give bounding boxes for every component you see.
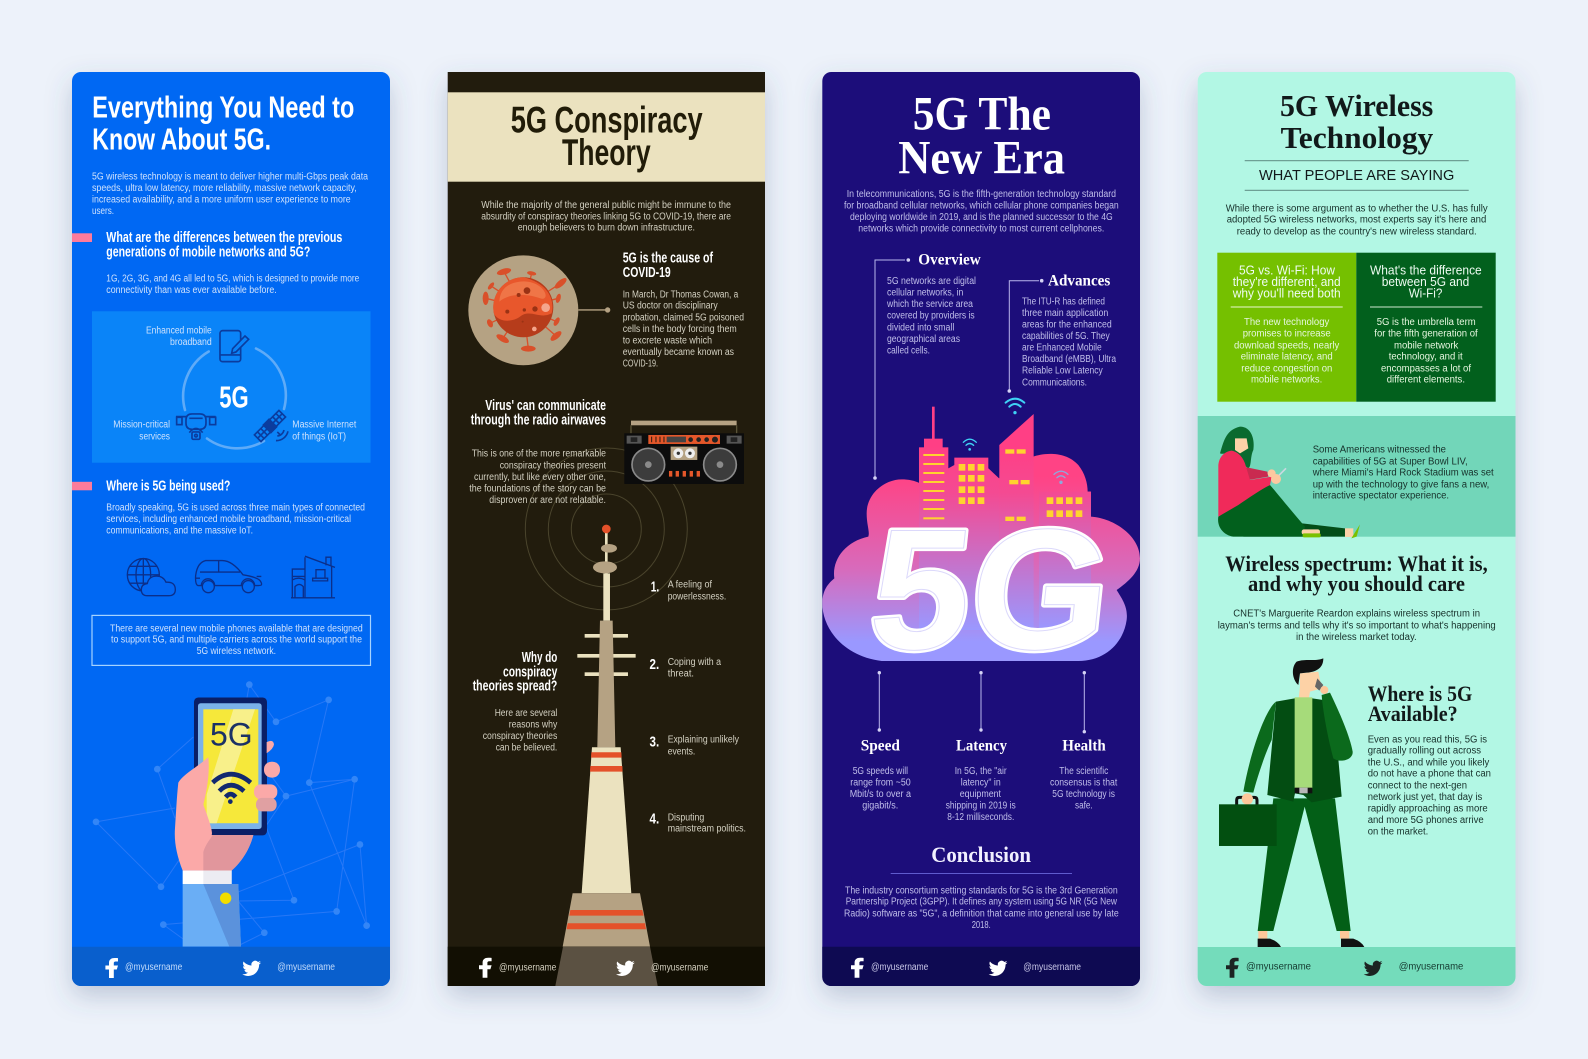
intro text: users.	[92, 206, 114, 217]
text: cause of covid: cells in the body forcing them	[623, 324, 737, 335]
icon: wifi large	[1006, 399, 1024, 414]
list item 3: events.	[668, 746, 695, 757]
title: Everything You Need to	[92, 89, 354, 124]
text: conclusion	[844, 885, 1119, 931]
intro text: deploying worldwide in 2019, and is the planned successor to the 4G	[850, 212, 1113, 223]
icon: wifi right	[1054, 471, 1068, 484]
handle: @myusername	[1023, 962, 1081, 973]
text: advances: capabilities of 5G. They	[1022, 331, 1110, 342]
heading: radio airwaves: through the radio airwaves	[471, 412, 606, 428]
text: where available: rapidly approaching as more	[1368, 803, 1488, 814]
list item 2: 2.	[650, 656, 659, 673]
column: latency: 8-12 milliseconds.	[947, 812, 1014, 823]
text: overview: covered by providers is	[887, 311, 975, 322]
icon: twitter	[1364, 961, 1382, 976]
box: difference between 5G and Wi-Fi	[1356, 253, 1496, 402]
sleeve	[183, 871, 241, 947]
text: super bowl: capabilities of 5G at Super Bowl LIV,	[1313, 456, 1468, 467]
text: overview: divided into small	[887, 322, 954, 333]
title	[898, 87, 1065, 184]
network background	[93, 681, 370, 945]
box: difference between 5G and Wi-Fi: mobile network	[1394, 340, 1459, 351]
text: cause of covid: In March, Dr Thomas Cowan, a	[623, 289, 739, 300]
heading: why spread: Why do	[522, 650, 557, 666]
column: health: The scientific	[1059, 766, 1108, 777]
list item 1: A feeling of	[668, 580, 712, 591]
heading: wireless spectrum: Wireless spectrum: What it is,	[1225, 551, 1488, 576]
signal rings	[525, 448, 687, 610]
icon: facebook	[479, 958, 492, 978]
panel: 5G conspiracy theory	[448, 72, 765, 986]
box: 5G vs Wi-Fi: 5G vs. Wi-Fi: How	[1239, 264, 1336, 278]
icon: twitter	[616, 961, 635, 976]
title: Technology	[1281, 120, 1434, 155]
column: latency: Latency	[956, 738, 1007, 755]
intro text: networks which provide connectivity to most current cellphones.	[858, 224, 1104, 235]
text: why spread: Here are several	[495, 708, 557, 719]
callout box: There are several new mobile phones available that are designed	[110, 623, 363, 634]
text: conclusion: Radio) software as "5G", a definition that came into general use by late	[844, 908, 1119, 919]
box: difference between 5G and Wi-Fi: between 5G and	[1382, 275, 1469, 289]
footer: social	[448, 947, 765, 986]
text: where used	[106, 503, 365, 537]
text: wireless spectrum: CNET's Marguerite Reardon explains wireless spectrum in	[1233, 609, 1480, 620]
text: where available: the U.S., and while you likely	[1368, 757, 1489, 768]
column: speed	[850, 738, 911, 812]
box: 5G vs Wi-Fi: download speeds, nearly	[1234, 340, 1339, 351]
label: mission critical: services	[139, 431, 170, 442]
title band: 5G Conspiracy	[511, 100, 703, 141]
text: cause of covid: to excrete waste which	[623, 335, 712, 346]
intro text: While there is some argument as to whether the U.S. has fully	[1226, 203, 1488, 214]
text: advances: are Enhanced Mobile	[1022, 343, 1102, 354]
text: advances: three main application	[1022, 308, 1108, 319]
text: where available	[1368, 734, 1491, 837]
footer: social	[72, 947, 390, 986]
connector: advances	[1008, 279, 1043, 393]
column: speed: Mbit/s to over a	[850, 789, 911, 800]
box: 5G vs Wi-Fi: they're different, and	[1233, 275, 1341, 289]
icon: twitter	[242, 961, 261, 976]
text: radio airwaves: the foundations of the story can be	[469, 483, 606, 494]
box: 5G vs Wi-Fi	[1217, 253, 1356, 402]
heading: overview: Overview	[918, 251, 981, 268]
text: cause of covid	[623, 289, 744, 370]
intro text: ready to develop as the country's new wireless standard.	[1237, 226, 1477, 237]
heading: where used: Where is 5G being used?	[106, 478, 230, 494]
text: why spread: reasons why	[509, 720, 557, 731]
list item 1: 1.	[651, 579, 659, 596]
text: where used: communications, and the massive IoT.	[106, 526, 253, 537]
list item 4: mainstream politics.	[668, 824, 746, 835]
illustration: boombox	[624, 421, 744, 484]
text: wireless spectrum	[1218, 609, 1496, 643]
windows	[923, 449, 1082, 521]
list item 2: Coping with a	[668, 657, 721, 668]
heading: cause of covid	[623, 251, 713, 281]
box: difference between 5G and Wi-Fi: technology, and it	[1389, 352, 1463, 363]
text: conclusion: 2018.	[972, 920, 991, 931]
intro text: 5G wireless technology is meant to deliver higher multi-Gbps peak data	[92, 171, 368, 182]
box: difference between 5G and Wi-Fi: for the fifth generation of	[1374, 329, 1478, 340]
phone: 5G	[210, 716, 253, 753]
heading: why spread	[473, 650, 557, 695]
column: speed: range from ~50	[850, 778, 911, 789]
heading: cause of covid: 5G is the cause of	[623, 251, 713, 267]
subtitle with rules: WHAT PEOPLE ARE SAYING	[1259, 167, 1454, 184]
text: where available: and more 5G phones arrive	[1368, 815, 1484, 826]
text: overview: called cells.	[887, 345, 930, 356]
box: 5G vs Wi-Fi: why you'll need both	[1232, 287, 1341, 301]
column: health: Health	[1062, 738, 1106, 755]
title	[92, 89, 354, 156]
heading: where available	[1368, 681, 1472, 726]
list item 4: Disputing	[668, 812, 704, 823]
illustration: tower	[563, 525, 650, 947]
icon: car	[195, 561, 262, 593]
text: advances: Broadband (eMBB), Ultra	[1022, 354, 1116, 365]
handle: @myusername	[499, 962, 557, 973]
column: health: 5G technology is	[1052, 789, 1115, 800]
text: advances: Reliable Low Latency	[1022, 366, 1103, 377]
icon: twitter	[989, 961, 1007, 976]
text: cause of covid: US doctor on disciplinary	[623, 301, 718, 312]
text: why spread: can be believed.	[496, 743, 557, 754]
label: enhanced mobile broadband: Enhanced mobile	[146, 325, 212, 336]
heading: wireless spectrum	[1225, 551, 1488, 596]
text: overview: cellular networks, in	[887, 288, 963, 299]
intro text	[844, 189, 1119, 235]
handle: @myusername	[1399, 961, 1464, 972]
heading: why spread: conspiracy	[503, 665, 557, 681]
label: enhanced mobile broadband	[146, 325, 212, 348]
text: overview: geographical areas	[887, 334, 960, 345]
title: Know About 5G.	[92, 121, 271, 156]
icon: facebook	[105, 958, 118, 978]
column: speed: 5G speeds will	[853, 766, 908, 777]
label: massive iot: of things (IoT)	[292, 431, 346, 442]
icon: facebook	[851, 958, 864, 978]
panel: everything you need to know about 5G	[72, 72, 390, 986]
icon: satellite	[254, 410, 288, 442]
heading: cause of covid: COVID-19	[623, 265, 671, 281]
buildings	[919, 407, 1091, 630]
text: advances: The ITU-R has defined	[1022, 296, 1105, 307]
heading: advances: Advances	[1048, 273, 1110, 290]
text: radio airwaves: This is one of the more remarkable	[472, 449, 606, 460]
accent bar	[72, 482, 92, 490]
intro text: enough believers to burn down infrastructure.	[518, 223, 695, 234]
text: cause of covid: eventually became known as	[623, 347, 734, 358]
text: super bowl: where Miami's Hard Rock Stadium was set	[1312, 468, 1494, 479]
text: why spread	[483, 708, 557, 754]
list item 4: 4.	[650, 811, 659, 828]
label: 5G: 5G	[219, 380, 249, 415]
box: 5G vs Wi-Fi: promises to increase	[1243, 329, 1331, 340]
text: cause of covid: COVID-19.	[623, 359, 658, 370]
column: speed: gigabit/s.	[862, 801, 898, 812]
list item 1	[651, 579, 726, 602]
column: latency: equipment	[960, 789, 1001, 800]
panel: 5G uses diagram	[92, 311, 370, 463]
text: generations: connectivity than was ever available before.	[106, 285, 277, 296]
handle: @myusername	[1246, 961, 1311, 972]
text: advances: areas for the enhanced	[1022, 319, 1112, 330]
box: difference between 5G and Wi-Fi: encompasses a lot of	[1381, 363, 1471, 374]
box: difference between 5G and Wi-Fi: 5G is the umbrella term	[1377, 317, 1476, 328]
icon: wifi small	[963, 439, 976, 451]
text: super bowl	[1312, 445, 1494, 502]
box: 5G vs Wi-Fi: reduce congestion on	[1241, 363, 1332, 374]
text: radio airwaves: conspiracy theories present	[500, 460, 606, 471]
box: difference between 5G and Wi-Fi: What's the difference	[1370, 264, 1482, 278]
text: radio airwaves	[469, 449, 606, 506]
intro text: In telecommunications, 5G is the fifth-generation technology standard	[847, 189, 1116, 200]
handle: @myusername	[871, 962, 929, 973]
intro text	[1226, 203, 1488, 237]
illustration: woman with phone	[1218, 427, 1360, 538]
column: latency: shipping in 2019 is	[946, 801, 1016, 812]
column: latency	[946, 738, 1016, 823]
text: where available: gradually rolling out across	[1368, 746, 1481, 757]
handle: @myusername	[651, 962, 709, 973]
intro text: adopted 5G wireless networks, most experts say it's here and	[1227, 215, 1486, 226]
box: 5G vs Wi-Fi: The new technology	[1244, 317, 1329, 328]
column: health: consensus is that	[1050, 778, 1117, 789]
heading: wireless spectrum: and why you should care	[1248, 571, 1465, 596]
illustration: virus	[468, 255, 610, 365]
text: overview	[886, 276, 976, 356]
text: generations	[106, 273, 360, 296]
accent bar	[72, 233, 92, 242]
connector: overview	[873, 258, 910, 480]
heading: differences: What are the differences between the previous	[106, 230, 342, 246]
footer: social	[822, 947, 1140, 986]
text: cause of covid: probation, claimed 5G poisoned	[623, 312, 744, 323]
icon: drone	[176, 414, 216, 439]
icon: globe and cloud	[127, 559, 175, 596]
intro text: increased availability, and a more uniform user experience to more	[92, 194, 351, 206]
list item 2	[650, 656, 721, 680]
text: where used: services, including enhanced mobile broadband, mission-critical	[106, 514, 351, 525]
handle: @myusername	[125, 962, 183, 973]
column: latency: latency" in	[961, 778, 1001, 789]
text: radio airwaves: disproven or are not relatable.	[489, 495, 606, 506]
title band	[448, 92, 765, 182]
title band: Theory	[562, 132, 651, 173]
big 5G: 5G	[862, 494, 1121, 686]
intro text: absurdity of conspiracy theories linking 5G to COVID-19, there are	[481, 211, 731, 222]
connectors: speed, latency, health	[878, 671, 1086, 733]
illustration: hand holding 5G phone	[93, 681, 370, 947]
text: super bowl: Some Americans witnessed the	[1313, 445, 1446, 456]
heading: radio airwaves	[471, 398, 606, 428]
big 5G: 5G	[862, 494, 1121, 686]
heading: why spread: theories spread?	[473, 679, 557, 695]
callout box	[92, 615, 370, 665]
text: super bowl: up with the technology to give fans a new,	[1313, 479, 1489, 490]
icon: tablet	[220, 331, 249, 362]
intro text	[92, 171, 368, 217]
box: 5G vs Wi-Fi: mobile networks.	[1251, 375, 1322, 386]
text: overview: which the service area	[886, 299, 973, 310]
text: conclusion: The industry consortium setting standards for 5G is the 3rd Generation	[845, 885, 1118, 896]
column: latency: In 5G, the "air	[955, 766, 1007, 777]
intro text	[481, 200, 731, 234]
text: where available: on the market.	[1368, 826, 1428, 837]
intro text: for broadband cellular networks, which cellular phone companies began	[844, 200, 1119, 211]
heading: differences	[106, 230, 342, 261]
column: health	[1050, 738, 1117, 812]
illustration: city cloud with 5G	[822, 399, 1140, 686]
label: massive iot: Massive Internet	[292, 420, 356, 431]
text: wireless spectrum: in the wireless market today.	[1296, 632, 1417, 643]
panel: 5G wireless technology	[1198, 72, 1516, 986]
text: radio airwaves: currently, but like every other one,	[474, 472, 606, 483]
label: massive iot	[292, 420, 356, 442]
phone	[194, 697, 267, 835]
hand	[175, 741, 280, 871]
text: where available: connect to the next-gen	[1368, 780, 1467, 791]
title: 5G Wireless	[1280, 88, 1433, 123]
list item 3: 3.	[650, 733, 659, 750]
text: advances: Communications.	[1022, 377, 1087, 388]
heading: conclusion: Conclusion	[931, 842, 1031, 867]
heading: where available: Available?	[1368, 701, 1458, 726]
icon: house	[291, 556, 335, 598]
text: why spread: conspiracy theories	[483, 731, 557, 742]
box: difference between 5G and Wi-Fi: different elements.	[1387, 375, 1465, 386]
intro text: speeds, ultra low latency, more reliability, massive network capacity,	[92, 183, 357, 194]
box: 5G vs Wi-Fi: eliminate latency, and	[1241, 352, 1333, 363]
handle: @myusername	[277, 962, 335, 973]
list item 2: threat.	[668, 669, 694, 680]
text: where available: network just yet, that day is	[1368, 792, 1482, 803]
text: generations: 1G, 2G, 3G, and 4G all led to 5G, which is designed to provide more	[106, 273, 360, 284]
text: where available: do not have a phone that can	[1368, 769, 1491, 780]
callout box: to support 5G, and multiple carriers across the world support the	[111, 635, 362, 646]
text: wireless spectrum: layman's terms and tells why it's so important to what's happening	[1218, 620, 1496, 631]
title: 5G The	[913, 87, 1051, 140]
text: where available: Even as you read this, 5G is	[1368, 734, 1487, 745]
callout box: 5G wireless network.	[197, 646, 276, 657]
list item 4	[650, 811, 746, 835]
list item 3	[650, 733, 739, 757]
panel: 5G the new era	[822, 72, 1140, 986]
label: mission critical	[113, 420, 170, 442]
icon: facebook	[1226, 958, 1239, 978]
label: mission critical: Mission-critical	[113, 420, 170, 431]
list item 1: powerlessness.	[668, 591, 726, 602]
heading: differences: generations of mobile networks and 5G?	[106, 245, 310, 261]
list item 3: Explaining unlikely	[668, 735, 739, 746]
heading: radio airwaves: Virus' can communicate	[485, 398, 606, 414]
label: enhanced mobile broadband: broadband	[170, 337, 212, 348]
title: New Era	[898, 131, 1065, 184]
cloud	[822, 454, 1140, 661]
footer: social	[1198, 947, 1516, 986]
text: where used: Broadly speaking, 5G is used across three main types of connected	[106, 503, 365, 514]
illustration: man on phone with briefcase	[1219, 658, 1364, 947]
text: conclusion: Partnership Project (3GPP). It defines any system using 5G NR (5G New	[846, 897, 1118, 908]
intro text: While the majority of the general public might be immune to the	[481, 200, 731, 211]
box: difference between 5G and Wi-Fi: Wi-Fi?	[1409, 287, 1442, 301]
text: overview: 5G networks are digital	[887, 276, 976, 287]
text: advances	[1022, 296, 1116, 388]
band: super bowl	[1198, 416, 1516, 538]
heading: where available: Where is 5G	[1368, 681, 1472, 706]
ring	[183, 348, 286, 448]
text: super bowl: interactive spectator experience.	[1313, 491, 1449, 502]
title	[1280, 88, 1434, 155]
column: health: safe.	[1075, 801, 1093, 812]
column: speed: Speed	[861, 738, 900, 755]
